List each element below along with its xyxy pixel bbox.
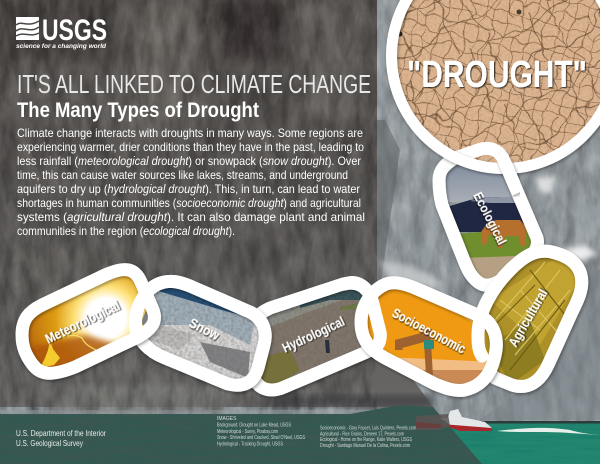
image credits: Socioeconomic - Gray Faucet, Luis Quintero, Pexels.com xyxy=(320,426,416,432)
link: Meteorological xyxy=(15,260,165,385)
link: Ecological: Ecological xyxy=(470,190,510,247)
image credits: Hydrological - Tracking Drought, USGS xyxy=(217,442,283,448)
link: Snow: Snow xyxy=(187,315,222,343)
icon: lightning xyxy=(42,340,60,366)
link: Socioeconomic xyxy=(355,275,505,400)
body text: experiencing warmer, drier conditions than they have in the past, leading to xyxy=(17,141,364,154)
image credits: Meteorological - Sunny, Pixabay.com xyxy=(217,429,278,435)
body text xyxy=(17,127,365,238)
overlap: Ecological link top arc inside disk xyxy=(455,148,503,158)
link: Agricultural: Agricultural xyxy=(506,287,551,350)
boat and wake xyxy=(416,409,600,435)
overlap: Agricultural link upper-left over Socioeconomic and Ecological xyxy=(478,251,571,356)
body text: communities in the region (ecological drought). xyxy=(17,225,235,238)
footer: agency names: U.S. Department of the Interior xyxy=(16,428,106,438)
logo: USGS xyxy=(16,14,107,50)
image credits: IMAGES xyxy=(217,416,237,422)
overlap: Hydrological link top-right over Socioeconomic xyxy=(345,283,380,346)
body text: Climate change interacts with droughts in many ways. Some regions are xyxy=(17,127,363,140)
link: Snow xyxy=(130,275,270,395)
link: Agricultural xyxy=(477,244,591,396)
overlap: Ecological link right side over ring xyxy=(499,154,518,193)
link: Ecological xyxy=(430,140,545,290)
image credits: Agricultural - Rice Grains, Deneen 17, Pexels.com xyxy=(320,432,404,438)
image credits xyxy=(217,416,416,449)
link: Socioeconomic: Socioeconomic xyxy=(390,305,468,357)
logo: USGS: USGS xyxy=(42,14,107,47)
icon: USGS wave mark xyxy=(16,17,39,40)
circle: cracked earth drought disk xyxy=(380,0,600,193)
body text: aquifers to dry up (hydrological drought). This, in turn, can lead to water xyxy=(17,183,360,196)
image credits: Drought - Santiago Manuel De la Colina, Pexels.com xyxy=(320,443,410,449)
image credits: Snow - Shriveled and Cracked, Shad O'Neel, USGS xyxy=(217,435,305,441)
subtitle: The Many Types of Drought xyxy=(17,99,259,122)
body text: shortages in human communities (socioeconomic drought) and agricultural xyxy=(17,197,361,210)
icon: elk xyxy=(481,220,527,248)
link: Hydrological xyxy=(252,276,373,399)
icon: faucet xyxy=(395,329,433,376)
footer: agency names xyxy=(16,428,106,448)
title: IT'S ALL LINKED TO CLIMATE CHANGE xyxy=(17,69,371,99)
link: Hydrological: Hydrological xyxy=(280,314,347,356)
body text: time, this can cause water sources like lakes, streams, and underground xyxy=(17,169,348,182)
body text: less rainfall (meteorological drought) or snowpack (snow drought). Over xyxy=(17,155,361,168)
image credits: Background: Drought on Lake Mead, USGS xyxy=(217,422,292,428)
ring: white disk border xyxy=(392,0,600,168)
overlap: Snow link top over Meteorological xyxy=(136,281,190,330)
image credits: Ecological - Home on the Range, Katie Walters, USGS xyxy=(320,437,412,443)
logo: USGS: science for a changing world xyxy=(16,43,107,50)
link: Meteorological: Meteorological xyxy=(43,298,122,347)
body text: systems (agricultural drought). It can also damage plant and animal xyxy=(17,211,365,224)
footer: agency names: U.S. Geological Survey xyxy=(16,438,84,448)
